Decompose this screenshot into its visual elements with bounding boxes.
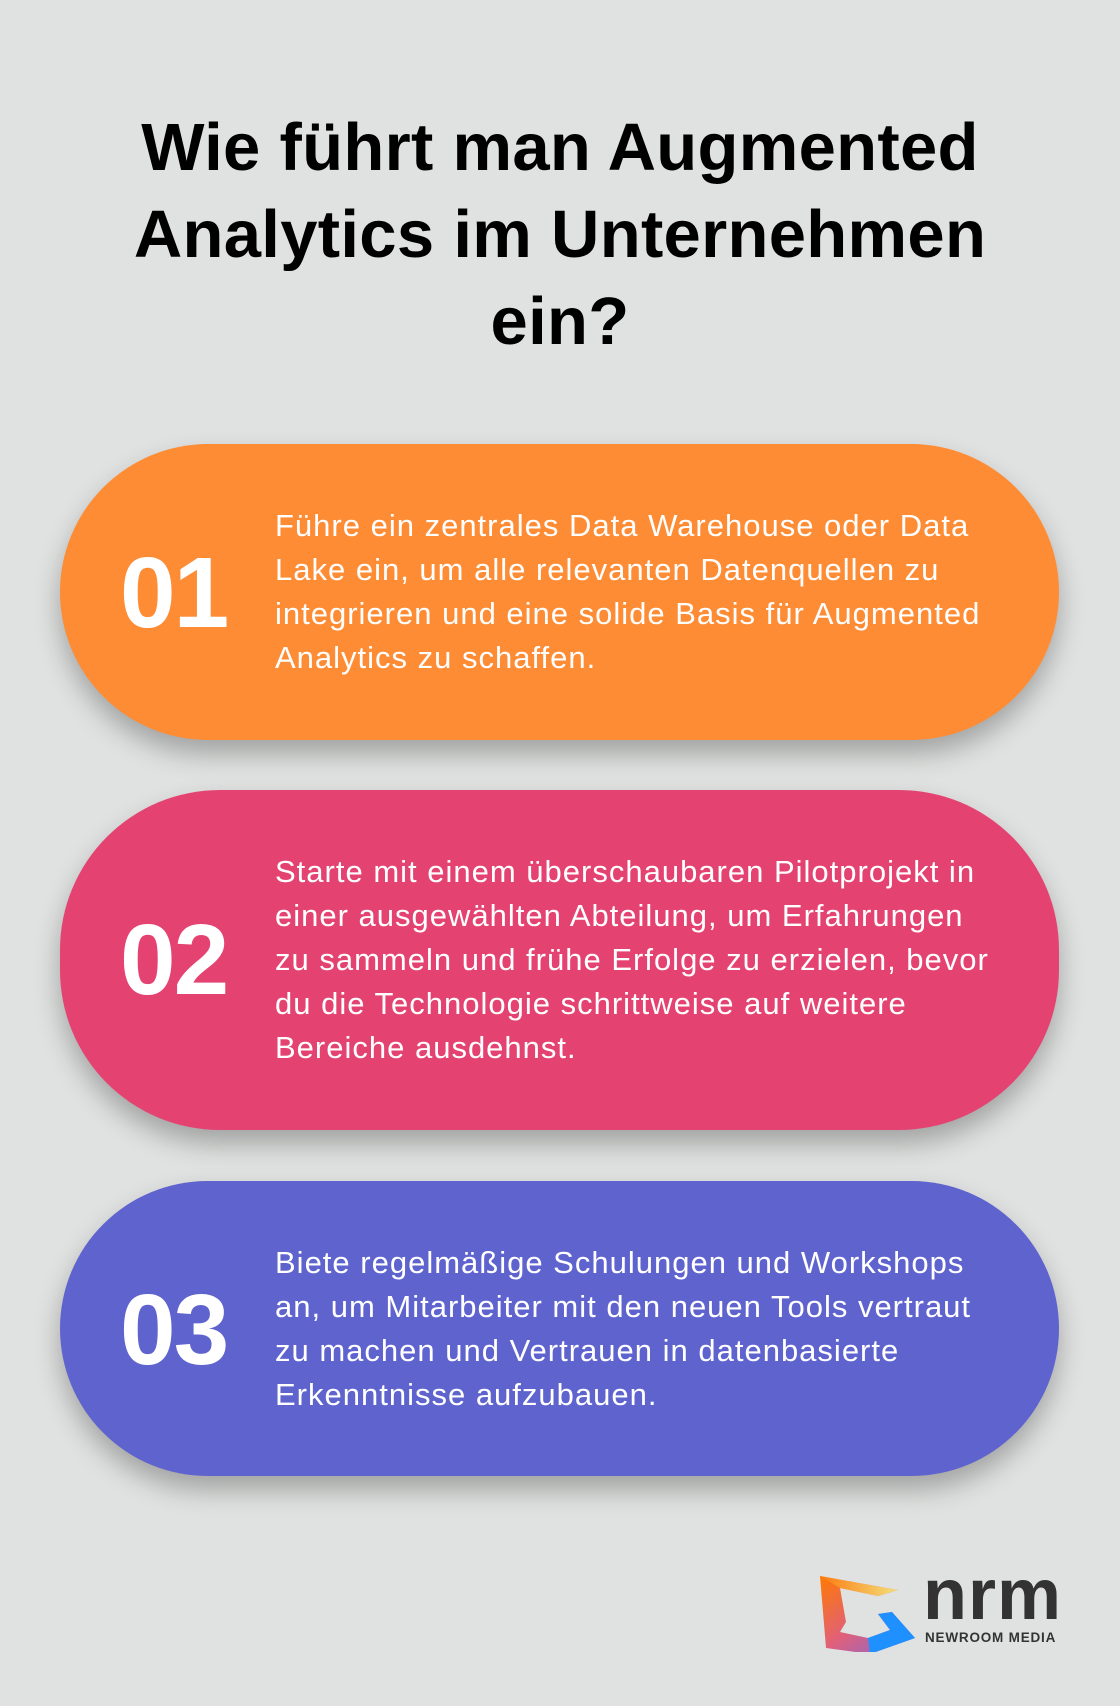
text 03: an, um Mitarbeiter mit den neuen Tools vertraut [275,1289,971,1324]
panel: step 02 [60,790,1059,1130]
text 01: Führe ein zentrales Data Warehouse oder Data [275,508,969,543]
text 01: Analytics zu schaffen. [275,640,596,675]
text 01 [275,508,980,675]
icon: logo mark [820,1576,915,1652]
logo [820,1555,1062,1652]
text 01: integrieren und eine solide Basis für Augmented [275,596,980,631]
panel: step 03 [60,1181,1059,1476]
text 02: Starte mit einem überschaubaren Pilotprojekt in [275,854,975,889]
number 02: 02 [120,904,227,1016]
text 02: einer ausgewählten Abteilung, um Erfahrungen [275,898,964,933]
text 02: zu sammeln und frühe Erfolge zu erzielen, bevor [275,942,989,977]
title: ein? [491,284,629,359]
text 03 [275,1245,971,1412]
text 02 [275,854,989,1065]
text 03: zu machen und Vertrauen in datenbasierte [275,1333,899,1368]
title: Wie führt man Augmented [141,110,979,185]
title: Analytics im Unternehmen [134,197,986,272]
title [134,110,986,359]
text 03: Erkenntnisse aufzubauen. [275,1377,657,1412]
text 02: Bereiche ausdehnst. [275,1030,577,1065]
text 03: Biete regelmäßige Schulungen und Workshops [275,1245,964,1280]
number 03: 03 [120,1274,227,1386]
number 01: 01 [120,537,227,649]
text 02: du die Technologie schrittweise auf weitere [275,986,907,1021]
panel: step 01 [60,444,1059,740]
wordmark: nrm [923,1555,1062,1635]
text 01: Lake ein, um alle relevanten Datenquellen zu [275,552,939,587]
tagline: NEWROOM MEDIA [925,1630,1056,1645]
